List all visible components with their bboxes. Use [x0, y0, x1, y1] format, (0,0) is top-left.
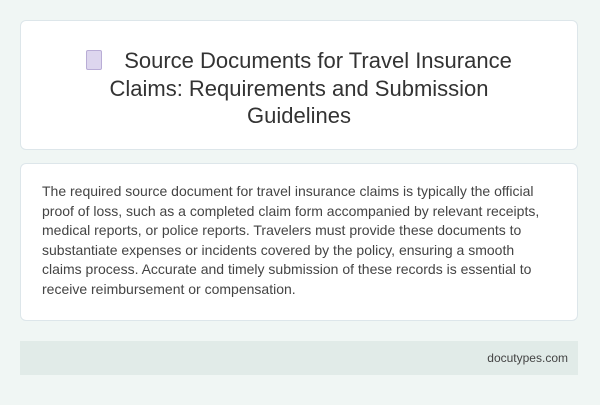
footer	[20, 341, 578, 375]
footer text: docutypes.com	[487, 351, 568, 365]
icon: document	[86, 50, 102, 70]
panel: description	[20, 163, 578, 321]
panel: title	[20, 20, 578, 150]
title: Source Documents for Travel Insurance Claims: Requirements and Submission Guidelines	[109, 48, 512, 128]
text block: The required source document for travel insurance claims is typically the official proof of loss, such as a completed claim form accompanied by relevant receipts, medical reports, or police reports. Travelers must provide these documents to substantiate expenses or incidents covered by the policy, ensuring a smooth claims process. Accurate and timely submission of these records is essential to receive reimbursement or compensation.	[42, 183, 539, 296]
